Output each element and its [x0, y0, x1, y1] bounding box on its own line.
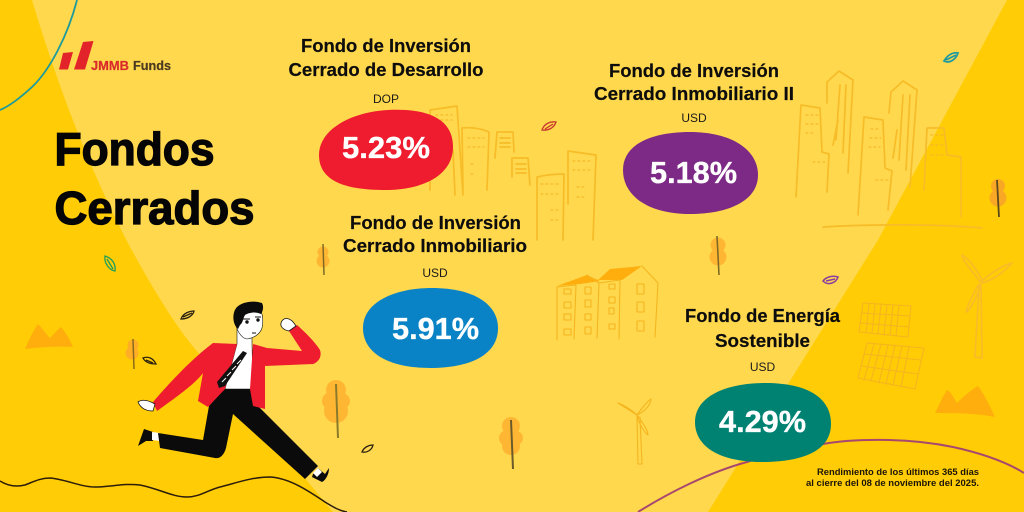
fund card: Energia Sostenible: USD	[750, 360, 775, 374]
jacket	[153, 325, 321, 411]
front shoe	[312, 468, 329, 482]
fund card: Inmobiliario II: 5.18%	[650, 155, 737, 190]
mountain: left	[25, 324, 73, 349]
mountain: right	[935, 386, 995, 417]
wind turbine: right	[962, 255, 1012, 358]
leaves	[105, 53, 958, 452]
houses with roofs	[557, 266, 658, 340]
logo: JMMB Funds	[59, 41, 171, 73]
logo: JMMB Funds: Funds	[133, 59, 171, 73]
illustration: running man	[138, 302, 329, 482]
fund card: Desarrollo: Fondo de Inversión	[301, 35, 471, 56]
tree: near title	[316, 244, 330, 275]
fund card: Desarrollo: 5.23%	[342, 130, 430, 165]
wind turbine: centre	[618, 399, 651, 464]
fund card: Inmobiliario: Fondo de Inversión	[350, 212, 521, 233]
tree: left small	[126, 339, 138, 369]
skyline: right city	[796, 71, 982, 228]
left hand	[138, 400, 155, 411]
fund card: Energia Sostenible: Sostenible	[715, 330, 810, 351]
title	[54, 123, 254, 234]
title: Cerrados	[54, 182, 254, 234]
fund card: Energia Sostenible	[685, 305, 841, 462]
footnote: Rendimiento de los últimos 365 días	[817, 467, 979, 478]
fund card: Inmobiliario: 5.91%	[392, 311, 479, 346]
tree: bottom centre	[499, 417, 523, 469]
fund card: Inmobiliario II: Cerrado Inmobiliario II	[594, 83, 794, 104]
background shape: right dark yellow	[708, 0, 1024, 512]
footnote: al cierre del 08 de noviembre del 2025.	[806, 478, 979, 489]
right hand	[281, 318, 296, 331]
fund card: Inmobiliario: Cerrado Inmobiliario	[343, 235, 527, 256]
head	[235, 306, 263, 339]
eyes	[243, 317, 261, 333]
fund card: Energia Sostenible: 4.29%	[719, 404, 806, 439]
footnote	[806, 467, 979, 489]
tree: near runner	[322, 380, 350, 438]
fund card: Desarrollo: DOP	[373, 92, 399, 106]
tree: far right	[990, 179, 1006, 217]
skyline: centre buildings	[430, 106, 596, 240]
fund card: Desarrollo: Cerrado de Desarrollo	[288, 59, 484, 80]
black wave line	[0, 477, 347, 512]
neck and shirt	[225, 329, 253, 389]
tie	[217, 351, 247, 388]
fund card: Inmobiliario II: USD	[681, 111, 707, 125]
background shape: left dark yellow	[0, 0, 333, 512]
fund card: Inmobiliario	[343, 212, 527, 368]
purple curve	[638, 440, 1024, 512]
solar panels	[858, 303, 924, 389]
back shoe	[138, 429, 153, 446]
title: Fondos	[54, 123, 214, 175]
fund card: Inmobiliario II	[594, 60, 794, 214]
teal curve	[0, 0, 77, 110]
logo: JMMB Funds: JMMB	[91, 59, 129, 73]
fund card: Inmobiliario: USD	[422, 266, 448, 280]
fund card: Inmobiliario II: Fondo de Inversión	[609, 60, 779, 81]
fund card: Energia Sostenible: Fondo de Energía	[685, 305, 841, 326]
trousers	[158, 387, 318, 479]
tree: centre right	[710, 236, 726, 275]
fund card: Desarrollo	[288, 35, 484, 190]
hair	[233, 302, 263, 329]
